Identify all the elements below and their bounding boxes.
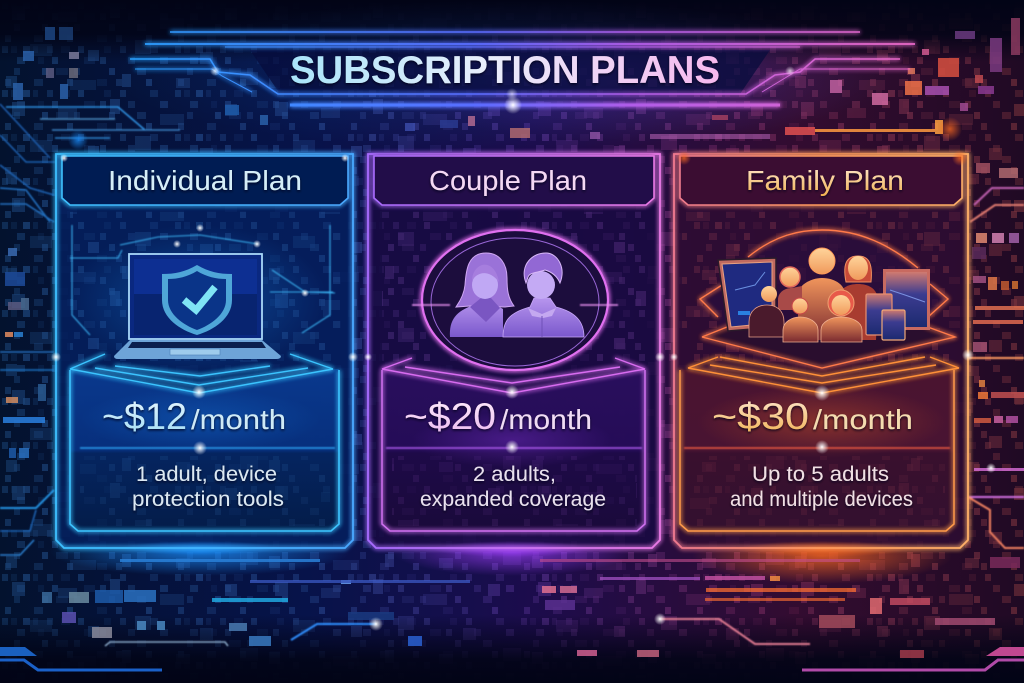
price: ~$30 [712,396,809,437]
price [102,396,286,437]
description: 2 adults, [473,463,556,486]
title text: SUBSCRIPTION PLANS [290,49,720,92]
title banner [130,32,915,114]
icon: woman [450,253,514,337]
glow nodes on card edges [51,150,974,362]
header box [680,156,962,205]
description: Up to 5 adults [752,463,889,486]
description [420,463,606,511]
chevron divider [382,358,645,393]
price panel outline [70,370,339,531]
price: /month [191,404,286,435]
description: protection tools [132,488,284,511]
price [712,396,913,437]
icon: shield [162,265,232,335]
icon: left monitor [718,258,776,331]
corner brackets [0,647,1024,670]
chevron divider [688,357,959,393]
header text: Family Plan [746,165,904,196]
icon: family and devices [700,230,955,368]
price panel outline [680,370,954,531]
price: /month [500,404,592,435]
card border [674,154,968,548]
icon: man [503,253,584,337]
title frame lines [130,32,915,105]
description: and multiple devices [730,488,913,511]
description: 1 adult, device [136,463,277,486]
description [132,463,284,511]
description: expanded coverage [420,488,606,511]
card border [368,154,660,548]
header box [62,156,348,205]
price: ~$12 [102,396,187,437]
header box [374,156,654,205]
panel: individual plan [56,154,353,555]
circuit traces [0,104,1024,646]
icon: children [749,286,862,342]
description [730,463,913,511]
icon: adults [778,248,878,340]
icon: small tablet and phone [866,294,905,340]
panel: couple plan [368,154,660,557]
panel: family plan [674,154,968,557]
chevron divider [70,354,333,393]
header text: Individual Plan [108,165,302,196]
price: ~$20 [404,396,496,437]
card border [56,154,353,548]
icon: laptop with shield [70,224,335,359]
price [404,396,592,437]
price: /month [813,404,913,435]
header text: Couple Plan [429,165,587,196]
price panel outline [382,370,645,531]
icon: right tablet [883,269,930,330]
icon: couple in ring [412,230,618,370]
